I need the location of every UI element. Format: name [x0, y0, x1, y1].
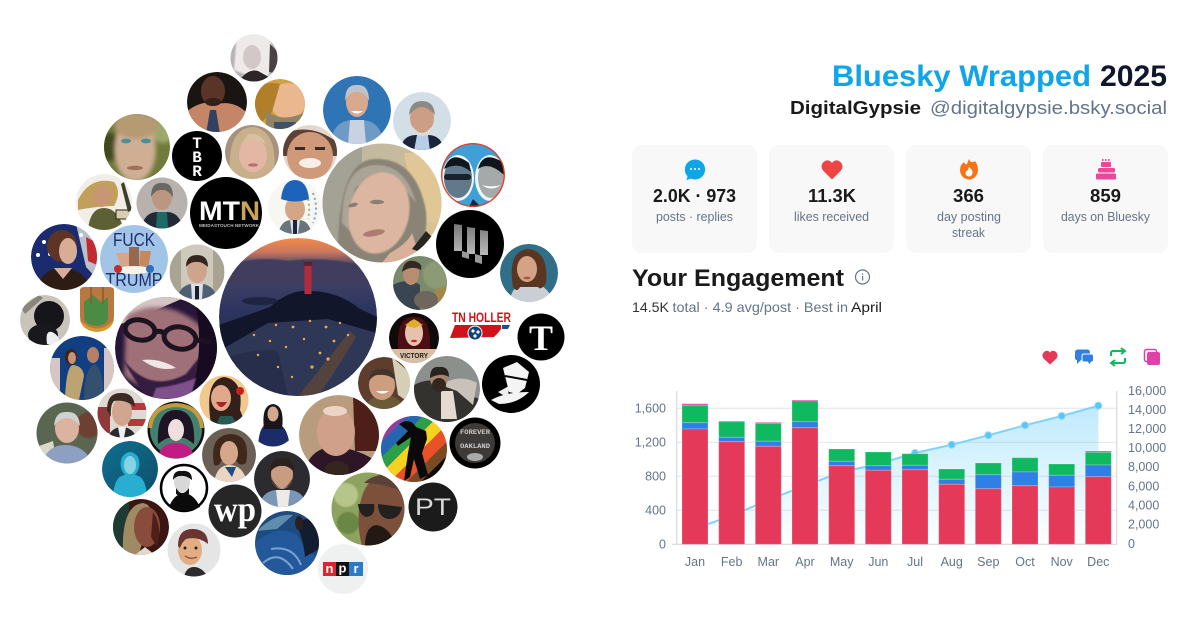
avatar: Forever Oakland: FOREVER	[460, 429, 490, 436]
month labels: Jul	[907, 555, 923, 569]
panel: day posting streak: day posting	[937, 210, 1001, 224]
right axis labels: 2,000	[1128, 518, 1159, 532]
avatar: man outdoors with pet	[393, 256, 451, 310]
heading: Your Engagement: Your Engagement	[632, 265, 844, 292]
icon: quotes legend squares	[1144, 350, 1160, 365]
avatar: city at dusk with Coit Tower	[219, 238, 377, 396]
panel: day posting streak: streak	[952, 226, 986, 240]
avatar: MTN logo	[190, 177, 262, 249]
avatar: blonde woman portrait	[225, 125, 279, 179]
icon: flame	[960, 159, 978, 180]
cumulative area	[695, 406, 1098, 544]
chart: engagement stacked bars with cumulative line	[635, 384, 1166, 569]
panel: likes received: 11.3K	[808, 186, 856, 206]
avatar: Fuck Trump artwork: FUCK	[113, 230, 155, 250]
panel: day posting streak	[906, 145, 1031, 253]
avatar: MTN logo: MEIDASTOUCH NETWORK	[199, 223, 260, 228]
avatar: smiling man close-up	[283, 125, 337, 180]
avatar: Washington Post logo: wp	[214, 489, 256, 529]
month labels	[685, 555, 1109, 569]
avatar: woman with curly hair	[500, 244, 558, 303]
avatar: Forever Oakland	[449, 417, 501, 469]
avatar: cartoon girl with rainbow	[147, 401, 205, 459]
panel: days on Bluesky: 859	[1090, 186, 1121, 206]
bar: December	[1085, 451, 1111, 544]
icon: reposts legend arrows	[1111, 348, 1125, 366]
bar: November	[1049, 464, 1075, 544]
avatar: man in party hat	[268, 180, 322, 234]
avatar: NPR logo: p	[339, 560, 347, 576]
avatar: American flag woman	[31, 224, 97, 290]
avatar: black and white dog	[20, 295, 70, 346]
icon: info	[856, 270, 870, 284]
avatar: New York Times logo	[518, 314, 564, 360]
bar: May	[829, 449, 855, 544]
panel: days on Bluesky	[1043, 145, 1168, 253]
stacked bars	[682, 400, 1111, 544]
month labels: Dec	[1087, 555, 1109, 569]
avatar: Fuck Trump artwork	[100, 225, 168, 293]
bar: August	[939, 469, 965, 544]
avatar: TBR logo: R	[192, 163, 202, 181]
avatar: older man with beard	[393, 92, 451, 151]
avatar: Forever Oakland: OAKLAND	[460, 443, 490, 450]
panel: posts and replies	[632, 145, 757, 253]
avatar: ship logo	[482, 355, 540, 413]
month labels: Sep	[977, 555, 999, 569]
avatar: blonde woman black and white	[230, 34, 278, 82]
avatar: selfie of woman with grey hair	[322, 143, 442, 263]
icon: likes legend heart	[1042, 351, 1058, 364]
avatar: woman with curly brown hair	[202, 428, 256, 482]
bar: April	[792, 400, 818, 544]
bar: January	[682, 404, 708, 544]
user name and handle: @digitalgypsie.bsky.social	[930, 98, 1167, 118]
left axis labels: 400	[645, 504, 666, 518]
month labels: Feb	[721, 555, 743, 569]
avatar: Lincoln engraving	[160, 464, 208, 512]
right axis labels: 8,000	[1128, 460, 1159, 474]
avatar: TBR logo: B	[192, 149, 202, 167]
avatar: woman with yellow hair and scarf	[254, 79, 306, 130]
month labels: Aug	[941, 555, 963, 569]
engagement summary: 14.5K	[632, 299, 670, 315]
avatar cluster	[20, 34, 564, 594]
avatar: Fuck Trump artwork: TRUMP	[106, 270, 162, 290]
avatar: blurred woman with green background	[104, 114, 170, 180]
bar: September	[975, 463, 1001, 544]
icon: replies legend bubbles	[1075, 350, 1094, 365]
avatar: two faces on blue	[441, 143, 505, 207]
avatar: man in striped shirt	[186, 72, 248, 134]
left axis labels: 1,600	[635, 402, 666, 416]
logo: TN Holler	[450, 310, 511, 340]
avatar: man in blue jacket	[323, 76, 391, 144]
avatar: man in suit with glasses	[169, 244, 225, 300]
avatar: man in sunglasses	[331, 472, 408, 546]
avatar: man in blue blazer	[254, 451, 310, 507]
month labels: May	[830, 555, 854, 569]
left axis labels: 1,200	[635, 436, 666, 450]
avatar: 3D cartoon man	[167, 523, 221, 577]
right axis labels: 14,000	[1128, 403, 1166, 417]
avatar: woman in military gear	[76, 174, 132, 230]
panel: day posting streak: 366	[953, 186, 984, 206]
month labels: Mar	[758, 555, 779, 569]
engagement summary: total · 4.9 avg/post · Best in	[672, 299, 848, 315]
panel: likes received	[769, 145, 894, 253]
title: 2025	[1100, 60, 1167, 93]
avatar: PT logo: PT	[415, 494, 451, 521]
avatar: man on couch	[414, 356, 480, 422]
avatar: MTN logo: N	[240, 196, 260, 226]
avatar: TBR logo	[172, 131, 222, 181]
icon: chat bubble	[685, 159, 705, 180]
left axis labels	[635, 402, 666, 552]
avatar: NPR logo	[318, 544, 368, 594]
user name and handle	[790, 98, 1167, 118]
avatar: New York Times logo: T	[529, 318, 553, 358]
cumulative line	[695, 402, 1102, 529]
avatar: NPR logo: n	[326, 561, 334, 576]
right axis labels: 16,000	[1128, 384, 1166, 398]
avatar: W logo	[436, 210, 504, 278]
month labels: Oct	[1015, 555, 1035, 569]
right axis labels: 12,000	[1128, 422, 1166, 436]
month labels: Nov	[1051, 555, 1074, 569]
avatar: PT logo	[408, 482, 458, 532]
bar: February	[719, 421, 745, 544]
avatar: woman in navy suit	[258, 404, 289, 446]
avatar: Kamala Harris and man with flags	[49, 336, 115, 400]
panel: days on Bluesky: days on Bluesky	[1061, 210, 1151, 224]
engagement summary: April	[851, 299, 882, 315]
title: Bluesky Wrapped	[832, 60, 1091, 93]
legend icons	[1042, 348, 1160, 366]
panel: likes received: likes received	[794, 210, 869, 224]
avatar: man with long hair	[113, 499, 169, 555]
avatar: NPR logo: r	[353, 561, 359, 576]
avatar: bald man with microphone	[299, 395, 379, 479]
icon: cake	[1096, 159, 1116, 180]
avatar: George Takei	[36, 402, 102, 464]
left axis labels: 0	[659, 538, 666, 552]
avatar: Wonder Woman poster	[389, 313, 439, 363]
right axis labels: 0	[1128, 537, 1135, 551]
avatar: blue horse rider painting	[255, 511, 319, 575]
right axis labels	[1128, 384, 1166, 551]
avatar: TBR logo: T	[192, 135, 202, 153]
avatar: young man with flag	[97, 388, 147, 438]
avatar: Washington Post logo	[208, 484, 262, 538]
panel: posts and replies: posts · replies	[656, 210, 733, 224]
month labels: Apr	[795, 555, 815, 569]
user name and handle: DigitalGypsie	[790, 98, 921, 118]
month labels: Jan	[685, 555, 705, 569]
avatar: Mark Cuban smiling	[358, 357, 410, 409]
avatar: MTN logo: MT	[199, 196, 241, 226]
engagement summary	[632, 299, 882, 315]
logo: TN Holler: TN HOLLER	[452, 310, 511, 325]
bar: July	[902, 454, 928, 544]
avatar: grey-haired man in dark jacket	[136, 177, 188, 229]
right axis labels: 4,000	[1128, 498, 1159, 512]
month labels: Jun	[868, 555, 888, 569]
right axis labels: 6,000	[1128, 480, 1159, 494]
avatar: pride silhouette	[381, 416, 447, 482]
left axis labels: 800	[645, 470, 666, 484]
bar: March	[755, 422, 781, 544]
panel: posts and replies: 2.0K · 973	[653, 186, 736, 206]
bar: June	[865, 452, 891, 544]
avatar: man with glasses in purple tint	[115, 297, 217, 399]
bar: October	[1012, 458, 1038, 544]
avatar: shield badge	[80, 287, 114, 332]
icon: heart	[822, 160, 842, 180]
right axis labels: 10,000	[1128, 441, 1166, 455]
avatar: hooded figure	[102, 441, 158, 497]
avatar: Wonder Woman poster: VICTORY	[400, 353, 428, 360]
avatar: laughing woman with red flower	[199, 375, 249, 425]
